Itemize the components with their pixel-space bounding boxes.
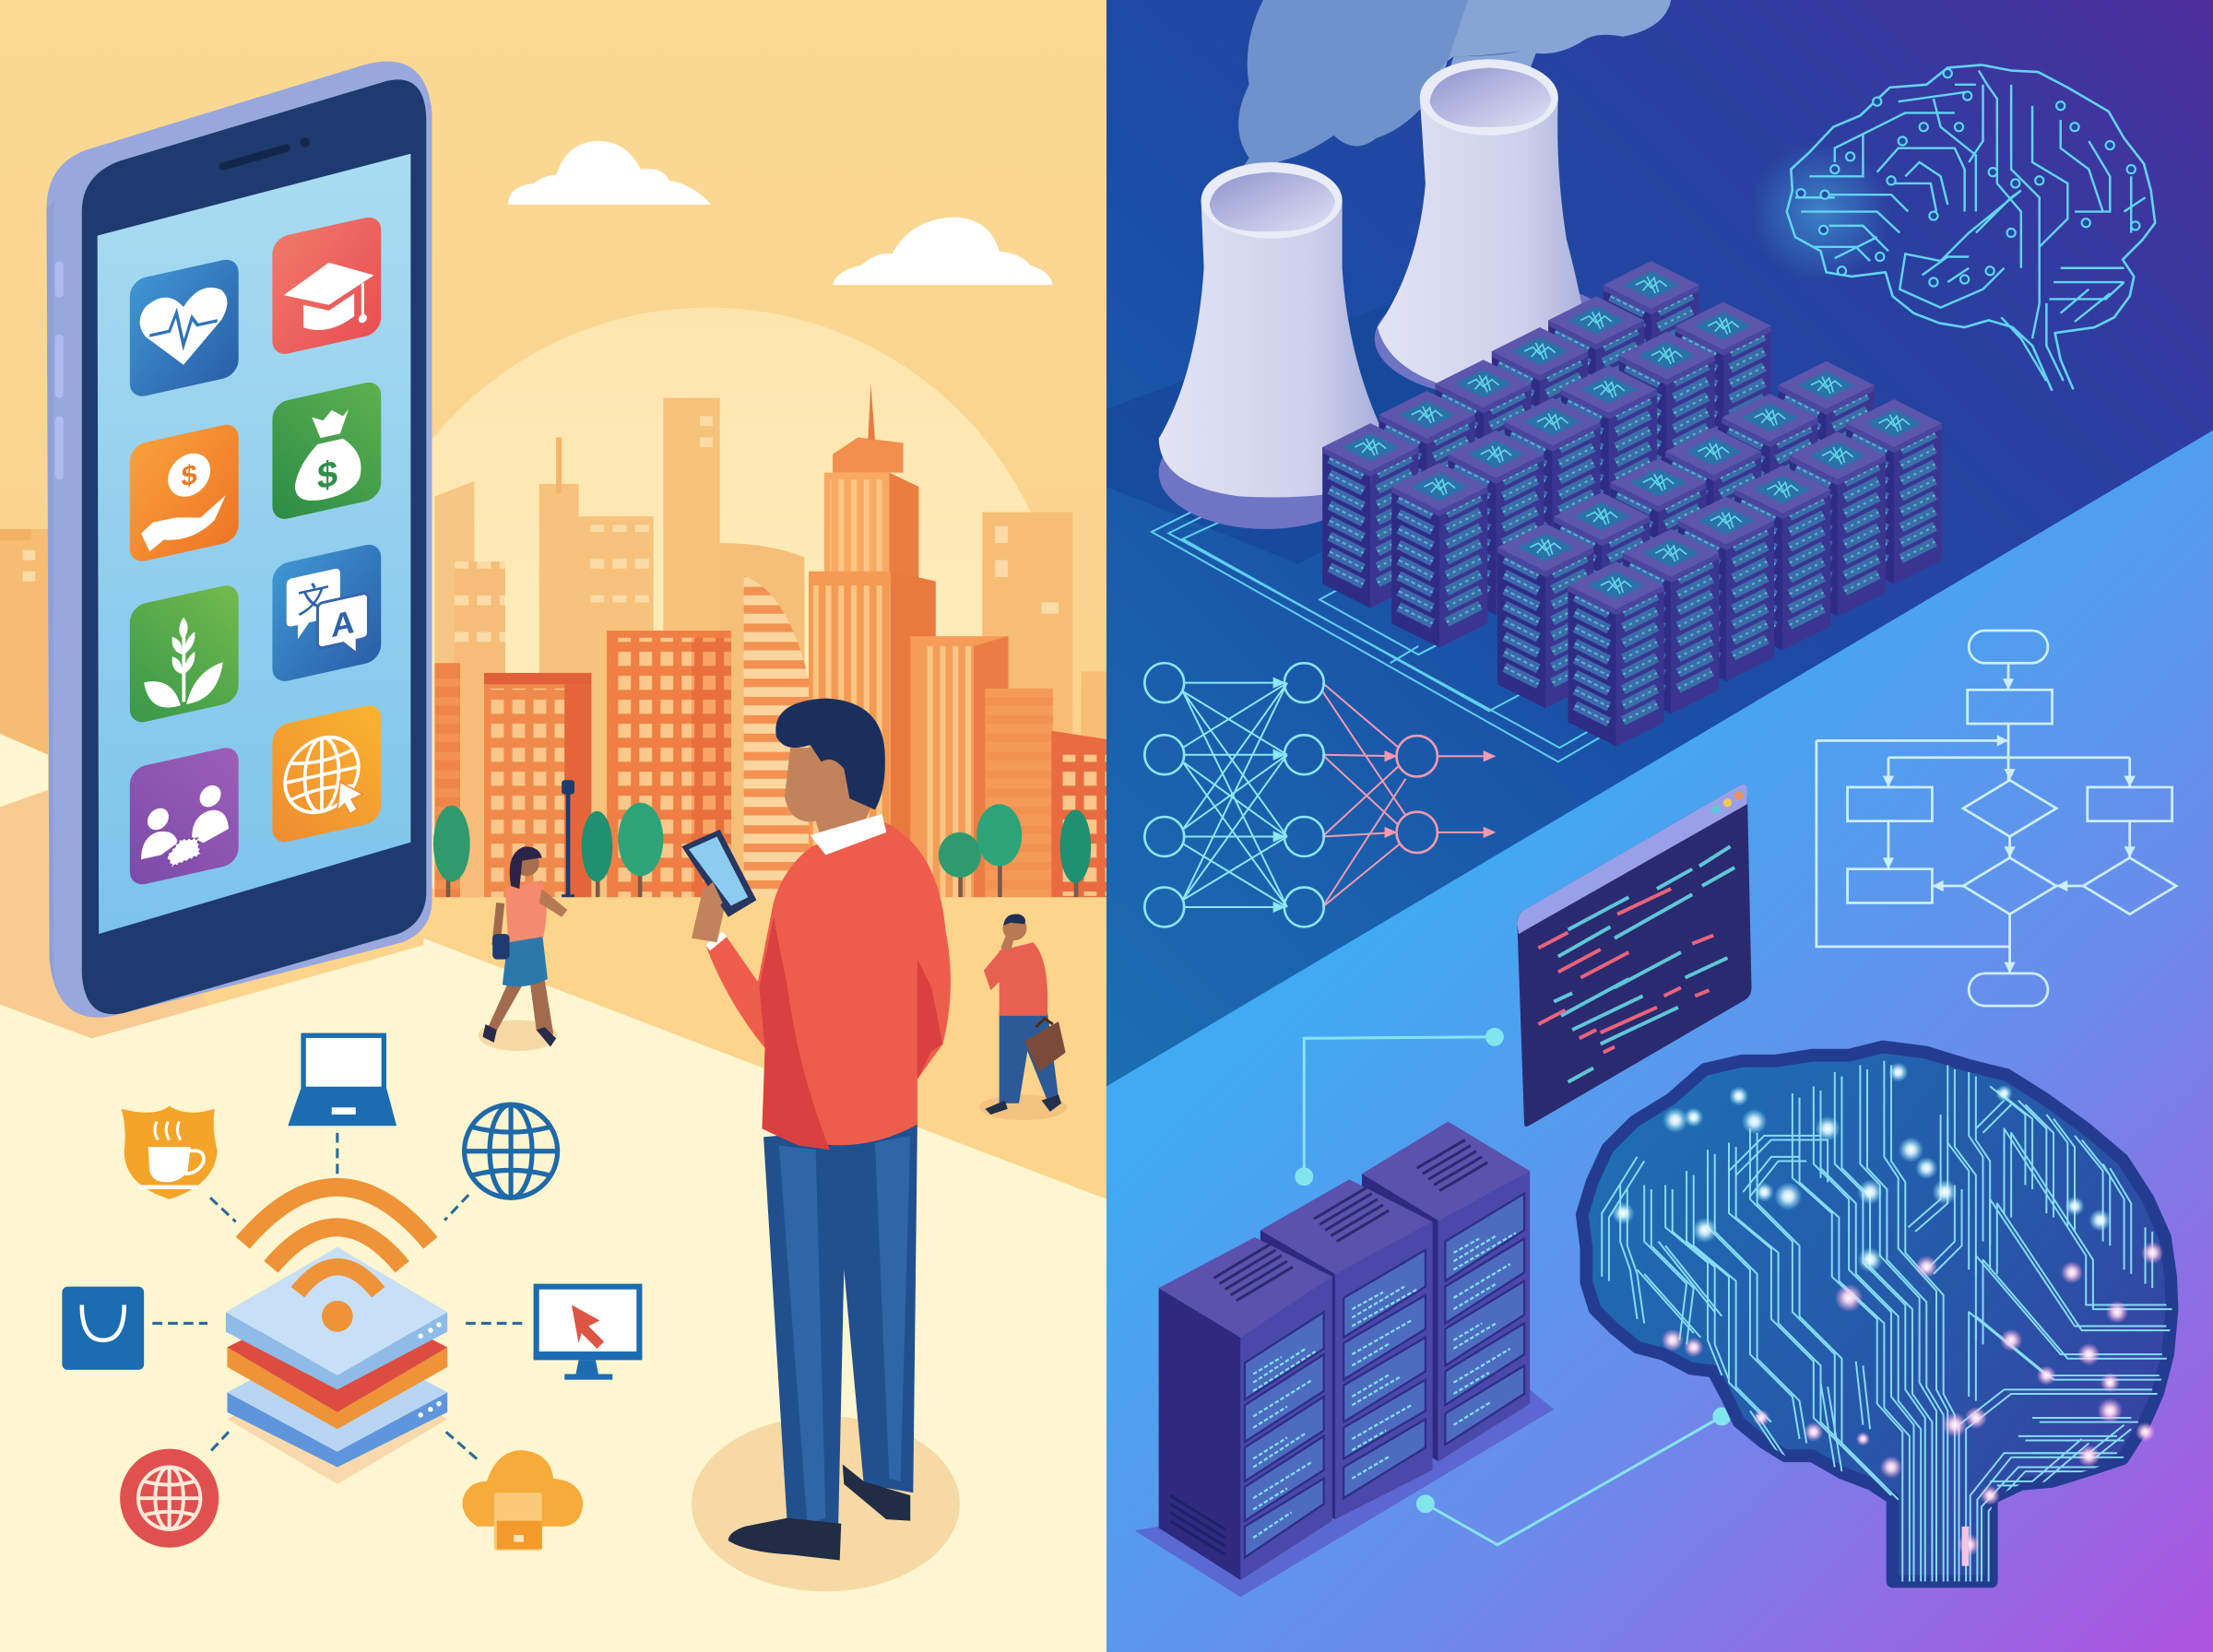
upper dark diagonal field xyxy=(1106,0,2213,1086)
cabinet middle xyxy=(1260,1179,1433,1519)
app icon: aid: $ xyxy=(182,457,197,493)
panel: AI infrastructure (right half) xyxy=(1106,0,2213,1652)
shadow under person xyxy=(692,1416,960,1591)
app icon: savings: $ xyxy=(317,452,337,498)
wifi arcs xyxy=(243,1187,431,1325)
isometric server farm xyxy=(1322,261,1942,747)
connector dashes xyxy=(152,1133,522,1461)
shoes xyxy=(728,1464,910,1561)
circuit brain large xyxy=(1582,1046,2173,1586)
sun disc behind skyline xyxy=(353,308,1064,1019)
neural network xyxy=(1144,663,1496,926)
neck and collar xyxy=(785,748,872,838)
circuit brain small xyxy=(1750,65,2155,391)
flowchart xyxy=(1817,631,2176,1006)
cabinet floor shadow xyxy=(1135,1389,1554,1597)
tree row xyxy=(433,803,1091,897)
street lamp xyxy=(562,780,574,903)
hair xyxy=(775,699,885,809)
handheld phone xyxy=(681,830,756,942)
person holding phone xyxy=(681,699,960,1591)
panel: connected city (left half) xyxy=(0,0,1106,1652)
icon: shopping bag xyxy=(62,1287,144,1370)
cooling tower front xyxy=(1159,162,1379,529)
cabinet right xyxy=(1362,1122,1530,1461)
cloud left xyxy=(508,141,711,205)
cloud right xyxy=(833,218,1053,285)
app icon: web xyxy=(272,702,381,845)
phone screen xyxy=(98,154,410,934)
brain glow nodes xyxy=(1612,1062,2163,1566)
connector: code to servers xyxy=(1296,1029,1502,1185)
man walking with briefcase xyxy=(979,914,1067,1120)
layered router xyxy=(226,1247,447,1484)
app icon: education xyxy=(272,215,381,357)
icon: cloud phone xyxy=(463,1450,583,1551)
network hub diagram xyxy=(62,1035,642,1551)
skyline back buildings xyxy=(0,398,1106,903)
connector: servers to brain xyxy=(1418,1409,1730,1545)
brain traces xyxy=(1602,1061,2173,1586)
server cabinets xyxy=(1135,1122,1554,1597)
icon: monitor xyxy=(534,1287,642,1380)
sweater xyxy=(705,821,951,1145)
ground plaza xyxy=(0,734,1106,1652)
app icon: translation: A xyxy=(331,603,355,644)
app icon: translation: 文 xyxy=(297,577,329,621)
trousers xyxy=(763,1123,917,1529)
code window xyxy=(1517,785,1751,1127)
smoke plumes xyxy=(1223,0,1671,233)
app icon: community xyxy=(130,745,239,888)
app icon: translation xyxy=(272,542,381,684)
woman walking with phone xyxy=(479,846,567,1051)
icon: coffee badge xyxy=(122,1106,218,1199)
cooling tower back xyxy=(1375,59,1623,398)
skyline front buildings xyxy=(434,384,1106,900)
icon: laptop xyxy=(288,1035,396,1126)
app icon: savings xyxy=(272,380,381,522)
tower ground shadow xyxy=(1106,296,1580,564)
icon: red globe xyxy=(120,1449,219,1548)
phone xyxy=(47,62,432,1018)
lower gradient field xyxy=(1106,0,2213,1652)
cabinet left xyxy=(1159,1237,1332,1580)
app icon: aid xyxy=(130,421,239,564)
app icon: agriculture xyxy=(130,583,239,726)
app icon: health xyxy=(130,256,239,399)
icon: blue globe xyxy=(465,1104,558,1198)
circuit lines under racks xyxy=(1152,509,1626,761)
